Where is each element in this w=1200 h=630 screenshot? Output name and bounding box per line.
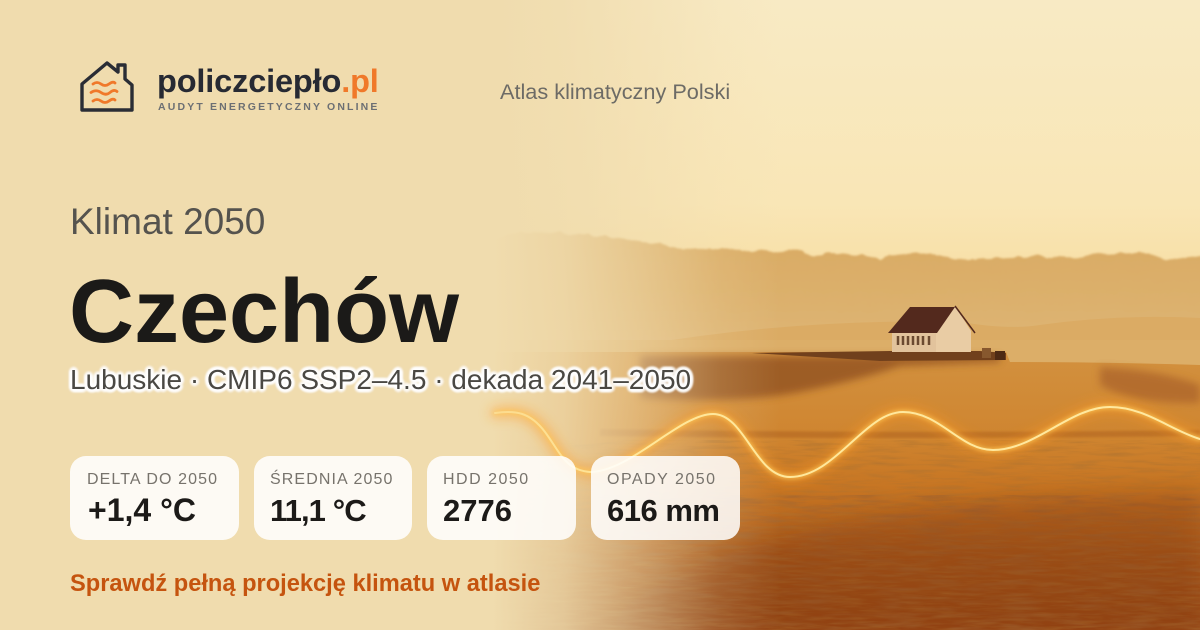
- stat card: precipitation: OPADY 2050: [607, 470, 717, 488]
- stat card: mean temperature: ŚREDNIA 2050: [270, 470, 393, 488]
- stat card: mean temperature: [254, 456, 412, 540]
- field: [480, 352, 1200, 630]
- eyebrow: Klimat 2050: [70, 201, 265, 242]
- house: [752, 306, 1006, 361]
- stat card: precipitation: [591, 456, 740, 540]
- stat card: delta: [70, 456, 239, 540]
- logo tagline: AUDYT ENERGETYCZNY ONLINE: [158, 101, 380, 113]
- distant hills: [480, 317, 1200, 366]
- stat card: HDD: [427, 456, 576, 540]
- logo wordmark: policzciepło.pl: [157, 63, 379, 99]
- stat card: delta: +1,4 °C: [88, 492, 196, 528]
- stat card: delta: DELTA DO 2050: [87, 470, 218, 488]
- stat card: HDD: HDD 2050: [443, 470, 530, 488]
- subtitle with white halo: Lubuskie · CMIP6 SSP2–4.5 · dekada 2041–2050: [70, 364, 691, 395]
- glowing wave: [495, 407, 1200, 477]
- tree line: [480, 232, 1200, 360]
- site label: Atlas klimatyczny Polski: [500, 79, 730, 104]
- logo: house icon with heat waves: [80, 61, 134, 112]
- call to action: Sprawdź pełną projekcję klimatu w atlasie: [70, 571, 540, 597]
- stat card: mean temperature: 11,1 °C: [270, 492, 366, 528]
- stat card: HDD: 2776: [443, 492, 512, 528]
- title: Czechów: [69, 262, 459, 362]
- stat card: precipitation: 616 mm: [607, 492, 719, 528]
